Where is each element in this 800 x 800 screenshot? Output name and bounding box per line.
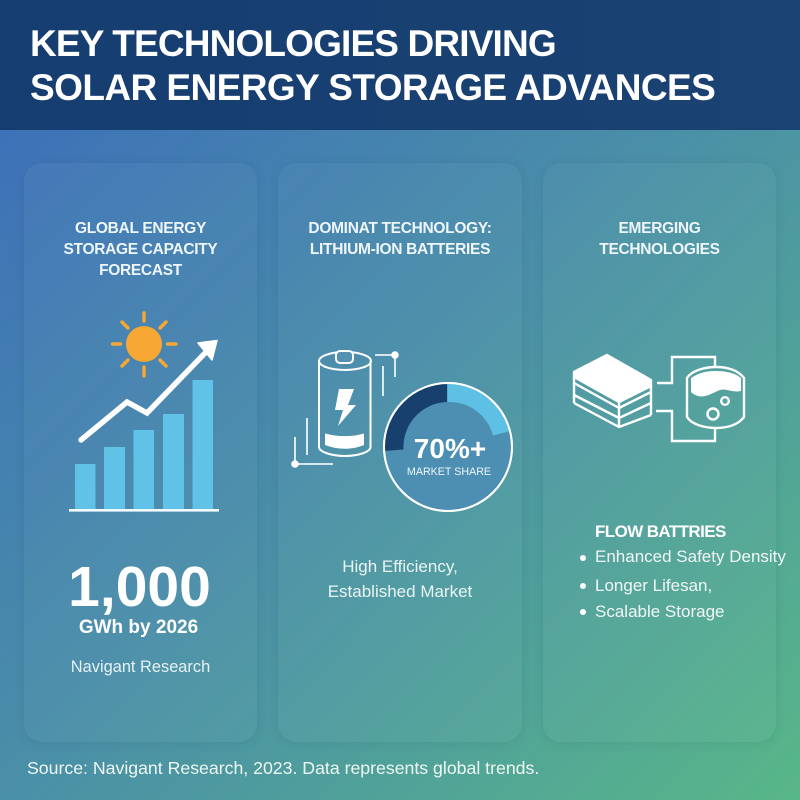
donut value: 70%+	[414, 433, 486, 464]
bullet	[580, 554, 586, 560]
icon: flow tank	[687, 367, 744, 428]
panel heading	[64, 220, 218, 279]
header band	[0, 0, 800, 130]
bullet	[580, 583, 586, 589]
panel heading	[308, 220, 492, 258]
donut chart	[384, 382, 512, 511]
flow batteries list	[580, 547, 786, 621]
panel heading	[599, 220, 720, 258]
list item: Scalable Storage	[595, 602, 724, 621]
icon: battery	[291, 351, 399, 468]
icon: sun	[112, 313, 176, 376]
description: Established Market	[328, 582, 472, 600]
connector lines	[291, 351, 399, 468]
donut label: MARKET SHARE	[407, 466, 491, 478]
source footnote: Source: Navigant Research, 2023. Data represents global trends.	[27, 758, 539, 778]
panel heading: STORAGE CAPACITY	[64, 241, 217, 258]
icon: connecting pipes	[656, 357, 715, 441]
arrow: growth trend	[81, 340, 217, 440]
panel heading: EMERGING	[618, 220, 700, 237]
panel heading: GLOBAL ENERGY	[75, 220, 206, 237]
panel: lithium-ion	[278, 163, 522, 742]
unit label: GWh by 2026	[79, 617, 198, 638]
list item: Longer Lifesan,	[595, 576, 712, 595]
bullet	[580, 609, 586, 615]
description: High Efficiency,	[342, 557, 458, 576]
panel heading: LITHIUM-ION BATTERIES	[310, 241, 490, 258]
big number: 1,000	[68, 555, 211, 619]
panel heading: FORECAST	[99, 262, 182, 279]
title: KEY TECHNOLOGIES DRIVING	[30, 23, 556, 64]
panel: capacity forecast	[24, 163, 257, 742]
title: SOLAR ENERGY STORAGE ADVANCES	[30, 67, 715, 108]
bar chart	[69, 380, 219, 512]
flow batteries heading: FLOW BATTRIES	[595, 522, 726, 541]
icon: cell stack	[574, 355, 651, 427]
source label: Navigant Research	[71, 658, 210, 676]
panel heading: TECHNOLOGIES	[599, 241, 720, 258]
description	[328, 557, 472, 600]
list item: Enhanced Safety Density	[595, 547, 786, 566]
panel: emerging technologies	[543, 163, 776, 742]
title	[30, 23, 715, 108]
panel heading: DOMINAT TECHNOLOGY:	[308, 220, 492, 237]
